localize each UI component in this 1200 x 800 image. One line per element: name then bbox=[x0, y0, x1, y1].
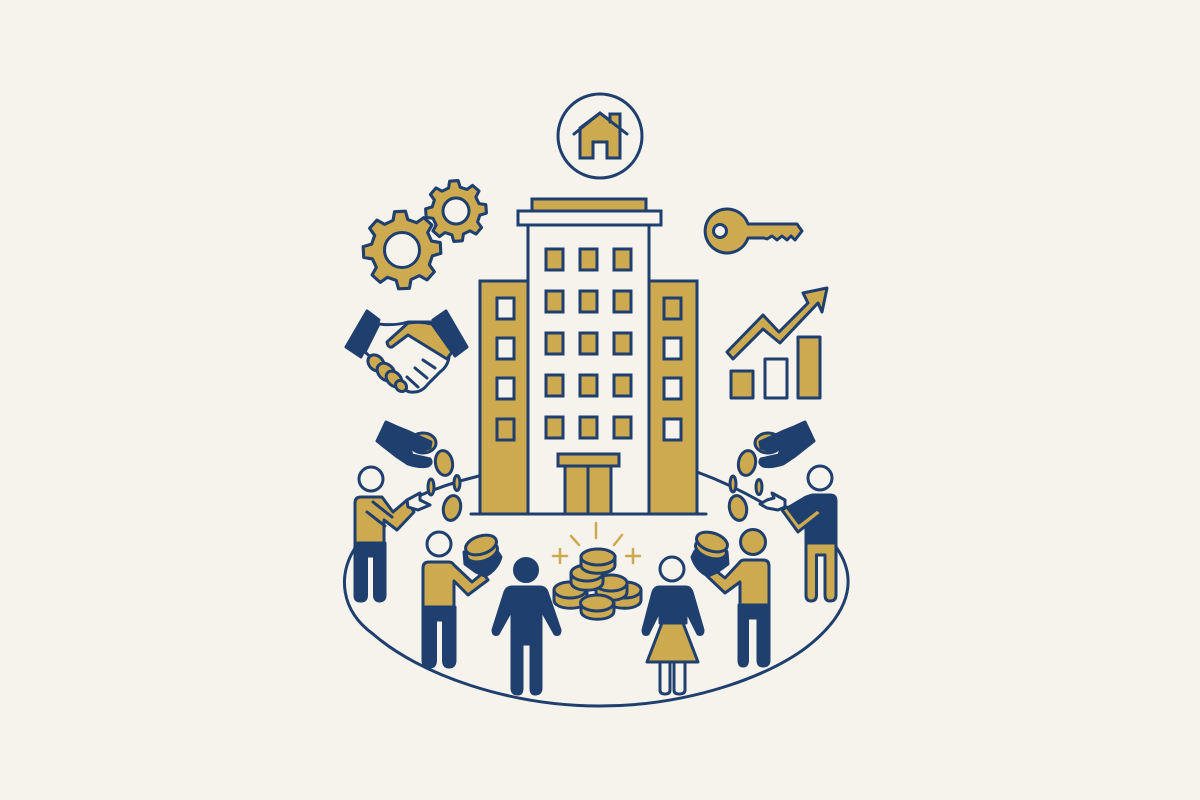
tower windows bbox=[546, 249, 631, 438]
person 1: reaching left figure bbox=[355, 467, 430, 601]
right giving hand with coins bbox=[727, 422, 814, 522]
left wing windows bbox=[497, 298, 514, 440]
entrance door bbox=[558, 454, 619, 514]
icon: house in circle bbox=[558, 94, 642, 178]
sparkle rays bbox=[553, 523, 640, 563]
person 5: holding coins, gold head bbox=[692, 528, 769, 666]
right wing bbox=[649, 281, 697, 514]
right wing windows bbox=[664, 298, 681, 440]
person 3: navy figure bbox=[493, 558, 560, 694]
building bbox=[471, 199, 706, 514]
person 4: woman in skirt bbox=[643, 557, 703, 694]
icon: growth chart bbox=[727, 288, 827, 398]
person 2: holding coins bbox=[423, 531, 501, 667]
central tower bbox=[528, 224, 649, 514]
left giving hand with coins bbox=[377, 422, 463, 522]
icon: key bbox=[705, 209, 802, 253]
ground line bbox=[471, 512, 706, 516]
central coin stack with sparkle bbox=[553, 523, 641, 619]
icon: gears bbox=[361, 179, 488, 291]
community ellipse outline bbox=[344, 472, 848, 706]
roof bbox=[518, 199, 661, 225]
icon: handshake bbox=[346, 311, 467, 394]
left wing bbox=[480, 281, 528, 514]
person 6: reaching right figure bbox=[760, 466, 836, 601]
